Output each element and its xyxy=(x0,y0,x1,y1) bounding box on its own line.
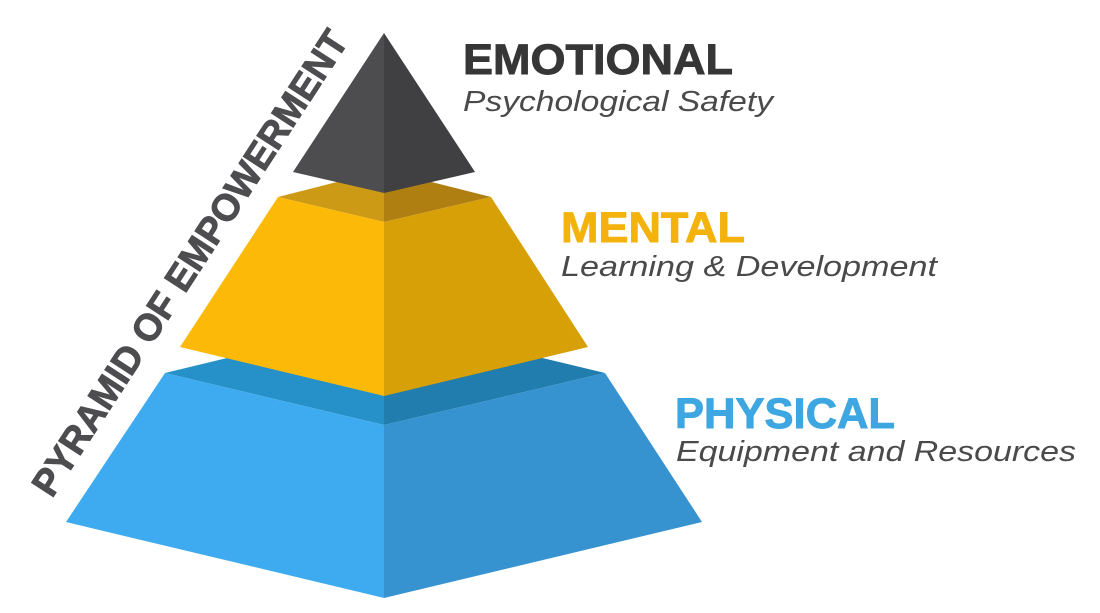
emotional tier: dark apex xyxy=(293,33,475,193)
label: emotional xyxy=(463,36,775,118)
label: mental: MENTAL xyxy=(561,204,745,252)
label: emotional: EMOTIONAL xyxy=(463,36,733,84)
label: mental: Learning & Development xyxy=(561,251,939,283)
label: physical xyxy=(675,390,1076,468)
label: mental xyxy=(561,204,939,283)
label: physical: PHYSICAL xyxy=(675,390,895,438)
pyramid diagram xyxy=(66,33,702,598)
mental tier: yellow middle xyxy=(180,170,588,396)
label: physical: Equipment and Resources xyxy=(676,436,1076,468)
label: emotional: Psychological Safety xyxy=(463,86,775,118)
physical tier: blue base xyxy=(66,320,702,598)
rotated title: pyramid of empowerment: PYRAMID OF EMPOWERMENT xyxy=(24,23,357,504)
